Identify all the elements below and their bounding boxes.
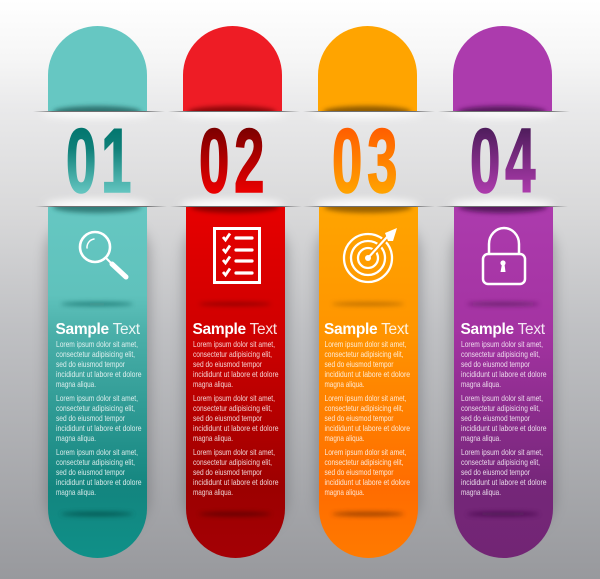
body text: Lorem ipsum dolor sit amet, (56, 339, 138, 349)
body text: incididunt ut labore et dolore (193, 369, 279, 379)
body text: sed do eiusmod tempor (193, 413, 262, 423)
panel: column 1 (48, 201, 147, 558)
body text: incididunt ut labore et dolore (461, 423, 547, 433)
body text: consectetur adipisicing elit, (461, 457, 540, 467)
panel: column 3 (319, 201, 418, 558)
heading: Sample Text (460, 321, 546, 338)
body text: Lorem ipsum dolor sit amet, (56, 447, 138, 457)
body text: Lorem ipsum dolor sit amet, (56, 393, 138, 403)
body text: magna aliqua. (56, 433, 96, 443)
body text: sed do eiusmod tempor (461, 467, 530, 477)
body text: incididunt ut labore et dolore (193, 477, 279, 487)
panel: column 4 (454, 201, 553, 558)
body text: Lorem ipsum dolor sit amet, (461, 447, 543, 457)
body text: magna aliqua. (324, 487, 364, 497)
body text: sed do eiusmod tempor (324, 413, 394, 423)
body text: incididunt ut labore et dolore (324, 477, 410, 487)
body text: Lorem ipsum dolor sit amet, (324, 339, 406, 349)
body text: consectetur adipisicing elit, (56, 403, 135, 413)
body text: sed do eiusmod tempor (324, 467, 394, 477)
body text (461, 339, 547, 497)
body text: magna aliqua. (324, 433, 364, 443)
body text: sed do eiusmod tempor (193, 467, 262, 477)
body text: Lorem ipsum dolor sit amet, (324, 393, 406, 403)
panel: column 1 top tab (48, 26, 147, 118)
body text: sed do eiusmod tempor (461, 359, 530, 369)
body text: consectetur adipisicing elit, (461, 403, 540, 413)
icon: padlock (483, 228, 525, 284)
body text: Lorem ipsum dolor sit amet, (324, 447, 406, 457)
body text: consectetur adipisicing elit, (193, 403, 272, 413)
body text: incididunt ut labore et dolore (56, 423, 142, 433)
body text: sed do eiusmod tempor (56, 413, 125, 423)
pill shadows (45, 215, 556, 535)
icon: magnifying glass (80, 232, 126, 277)
body text: magna aliqua. (193, 433, 233, 443)
body text: magna aliqua. (193, 379, 233, 389)
panel: column 2 top tab (183, 26, 282, 118)
body text: magna aliqua. (461, 433, 501, 443)
body text: incididunt ut labore et dolore (324, 369, 410, 379)
body text: incididunt ut labore et dolore (324, 423, 410, 433)
body text: incididunt ut labore et dolore (461, 477, 547, 487)
body text: sed do eiusmod tempor (461, 413, 530, 423)
number 04: 04 (470, 110, 540, 211)
body text: Lorem ipsum dolor sit amet, (193, 393, 275, 403)
centre band highlights and fold lines (33, 108, 570, 211)
body text: consectetur adipisicing elit, (56, 457, 135, 467)
body text: Lorem ipsum dolor sit amet, (193, 339, 275, 349)
body text: consectetur adipisicing elit, (324, 349, 404, 359)
panel: column 4 top tab (453, 26, 552, 118)
body text: sed do eiusmod tempor (56, 359, 125, 369)
panel: column 2 (186, 201, 285, 558)
number 03: 03 (332, 110, 402, 211)
panel: column 3 top tab (318, 26, 417, 118)
body text: Lorem ipsum dolor sit amet, (461, 339, 543, 349)
body text: incididunt ut labore et dolore (56, 477, 142, 487)
body text: consectetur adipisicing elit, (324, 457, 404, 467)
heading: Sample Text (192, 321, 278, 338)
number 02: 02 (199, 110, 269, 211)
body text: sed do eiusmod tempor (193, 359, 262, 369)
body text: consectetur adipisicing elit, (193, 349, 272, 359)
body text (56, 339, 142, 497)
body text: magna aliqua. (56, 487, 96, 497)
icon: checklist (214, 228, 260, 282)
body text: incididunt ut labore et dolore (461, 369, 547, 379)
body text: consectetur adipisicing elit, (56, 349, 135, 359)
body text (193, 339, 279, 497)
number 01: 01 (66, 110, 136, 211)
body text (324, 339, 410, 497)
body text: incididunt ut labore et dolore (193, 423, 279, 433)
heading: Sample Text (56, 321, 141, 338)
body text: consectetur adipisicing elit, (193, 457, 272, 467)
body text: magna aliqua. (461, 379, 501, 389)
body text: magna aliqua. (193, 487, 233, 497)
heading: Sample Text (324, 321, 409, 338)
body text: incididunt ut labore et dolore (56, 369, 142, 379)
icon: target with dart (344, 228, 397, 282)
body text: consectetur adipisicing elit, (461, 349, 540, 359)
body text: magna aliqua. (461, 487, 501, 497)
body text: Lorem ipsum dolor sit amet, (193, 447, 275, 457)
body text: Lorem ipsum dolor sit amet, (461, 393, 543, 403)
body text: magna aliqua. (56, 379, 96, 389)
body text: consectetur adipisicing elit, (324, 403, 404, 413)
body text: sed do eiusmod tempor (56, 467, 125, 477)
body text: magna aliqua. (324, 379, 364, 389)
body text: sed do eiusmod tempor (324, 359, 394, 369)
